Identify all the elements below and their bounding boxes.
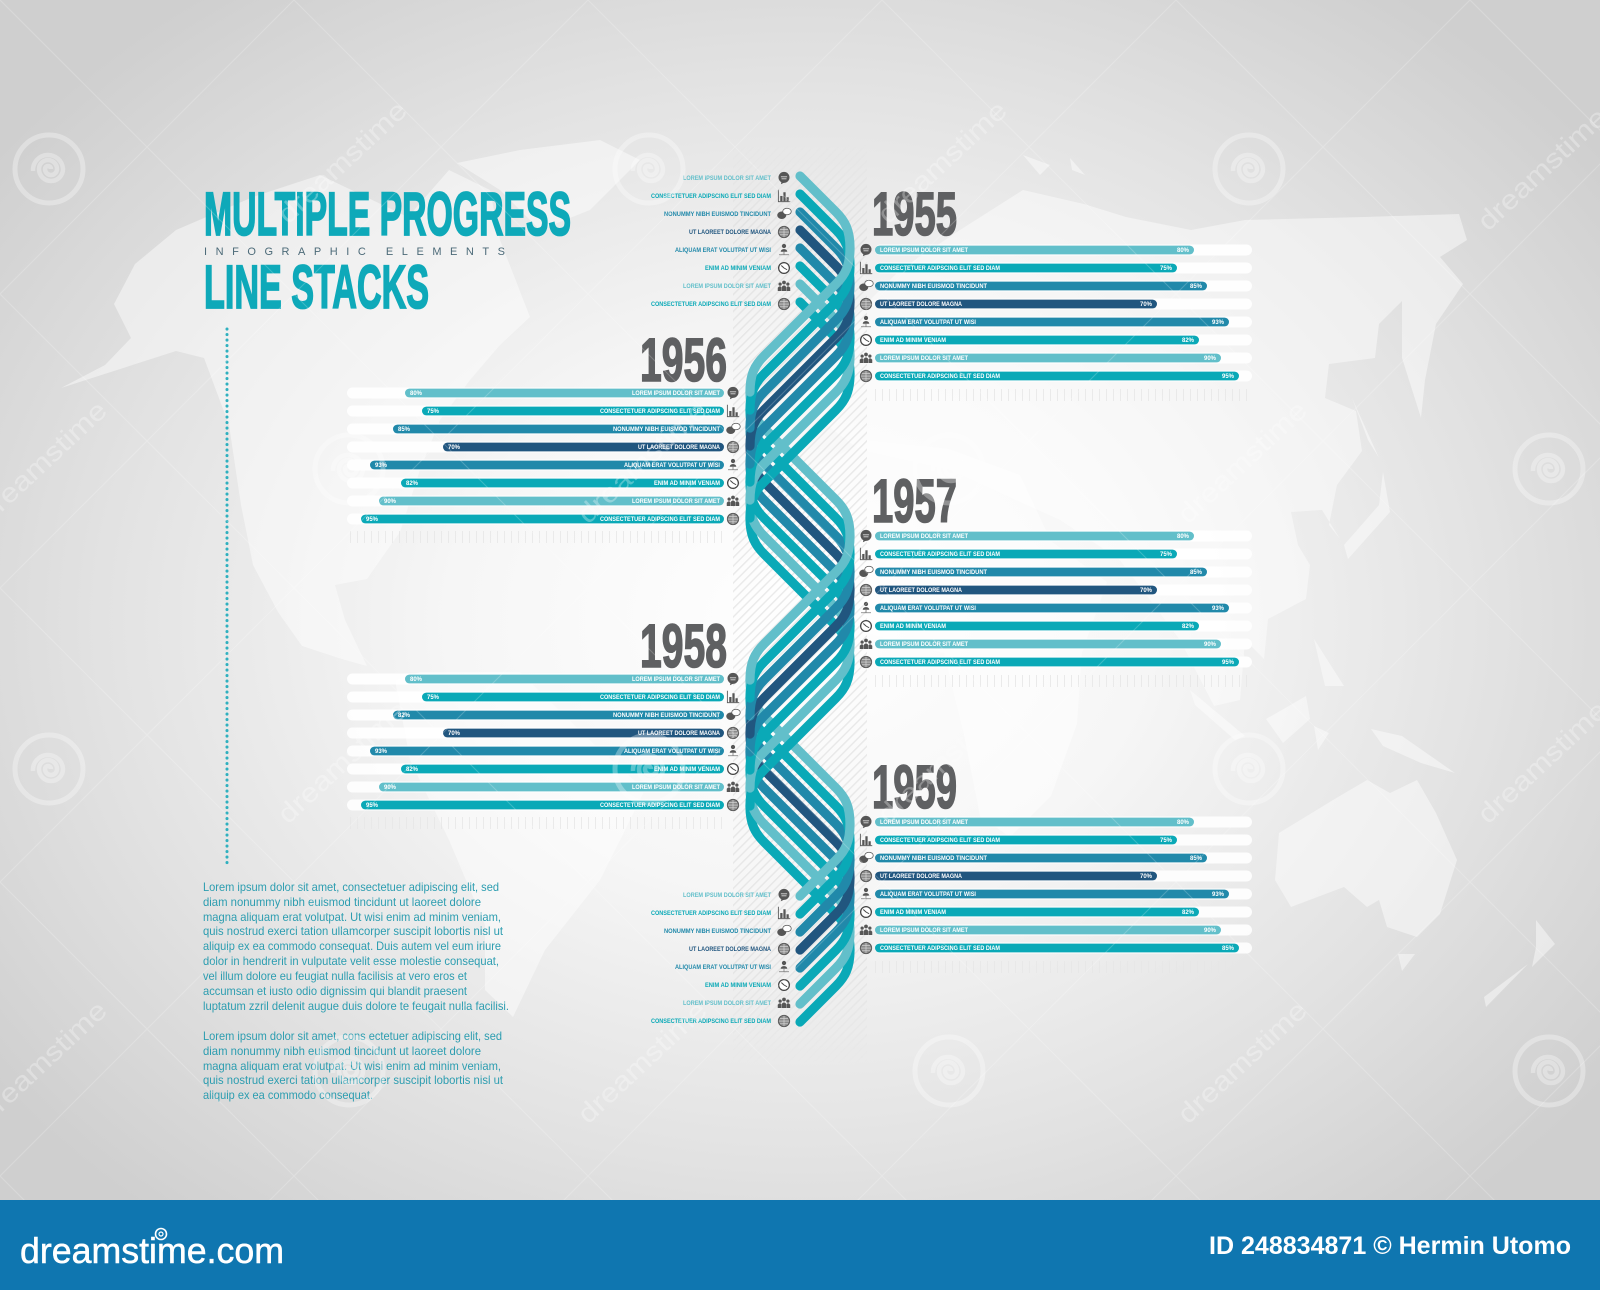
top label stack: CONSECTETUER ADIPSCING ELIT SED DIAM	[651, 301, 771, 308]
panel: 1957: NONUMMY NIBH EUISMOD TINCIDUNT	[880, 569, 987, 576]
panel: 1955: LOREM IPSUM DOLOR SIT AMET	[880, 247, 968, 254]
panel: 1957: LOREM IPSUM DOLOR SIT AMET	[880, 641, 968, 648]
panel: 1957	[859, 467, 1252, 687]
helix backdrop stripes	[733, 206, 867, 996]
bottom label stack: ENIM AD MINIM VENIAM	[705, 982, 771, 989]
body text: diam nonummy nibh euismod tincidunt ut laoreet dolore	[203, 1044, 481, 1058]
panel: 1959	[859, 753, 1252, 973]
bottom label stack: LOREM IPSUM DOLOR SIT AMET	[683, 1000, 771, 1007]
top label stack: LOREM IPSUM DOLOR SIT AMET	[683, 175, 771, 182]
body text: aliquip ex ea commodo consequat. Duis autem vel eum iriure	[203, 939, 501, 953]
panel: 1955: UT LAOREET DOLORE MAGNA	[880, 301, 962, 308]
panel: 1956: CONSECTETUER ADIPSCING ELIT SED DIAM	[600, 516, 720, 523]
body text: quis nostrud exerci tation ullamcorper suscipit lobortis nisl ut	[203, 924, 504, 938]
panel: 1958: NONUMMY NIBH EUISMOD TINCIDUNT	[613, 712, 720, 719]
panel: 1959: LOREM IPSUM DOLOR SIT AMET	[880, 927, 968, 934]
panel: 1959: 75%	[1160, 838, 1173, 844]
bottom label stack	[651, 889, 791, 1027]
bottom label stack: NONUMMY NIBH EUISMOD TINCIDUNT	[664, 928, 771, 935]
panel: 1958: CONSECTETUER ADIPSCING ELIT SED DIAM	[600, 694, 720, 701]
top label stack: CONSECTETUER ADIPSCING ELIT SED DIAM	[651, 193, 771, 200]
panel: 1959: 80%	[1177, 820, 1190, 826]
body text: quis nostrud exerci tation ullamcorper suscipit lobortis nisl ut	[203, 1073, 504, 1087]
panel: 1956: 93%	[375, 463, 388, 469]
watermarks: dreamstime	[272, 95, 413, 229]
title: INFOGRAPHIC ELEMENTS	[204, 246, 505, 258]
watermarks: dreamstime	[572, 395, 713, 529]
panel: 1955: 93%	[1212, 320, 1225, 326]
panel: 1959: CONSECTETUER ADIPSCING ELIT SED DIAM	[880, 837, 1000, 844]
top label stack: LOREM IPSUM DOLOR SIT AMET	[683, 283, 771, 290]
panel: 1958	[347, 612, 740, 829]
watermarks: dreamstime	[1472, 695, 1600, 829]
panel: 1956: 70%	[448, 445, 461, 451]
panel: 1955: ALIQUAM ERAT VOLUTPAT UT WISI	[880, 319, 976, 326]
watermarks: dreamstime	[572, 995, 713, 1129]
body text	[203, 880, 509, 1102]
world map	[61, 140, 1555, 1017]
panel: 1959: 93%	[1212, 892, 1225, 898]
panel: 1957: 80%	[1177, 534, 1190, 540]
panel: 1959: 85%	[1190, 856, 1203, 862]
title	[204, 180, 571, 321]
panel: 1958: 82%	[398, 713, 411, 719]
panel: 1957: 82%	[1182, 624, 1195, 630]
panel: 1957: 70%	[1140, 588, 1153, 594]
panel: 1959: CONSECTETUER ADIPSCING ELIT SED DIAM	[880, 945, 1000, 952]
helix ribbon stack	[750, 176, 850, 1022]
body text: magna aliquam erat volutpat. Ut wisi enim ad minim veniam,	[203, 1059, 501, 1073]
panel: 1955: 95%	[1222, 374, 1235, 380]
bottom label stack: LOREM IPSUM DOLOR SIT AMET	[683, 892, 771, 899]
watermarks: dreamstime	[272, 695, 413, 829]
panel: 1959: 82%	[1182, 910, 1195, 916]
panel: 1958: 1958	[640, 612, 727, 680]
panel: 1957: ALIQUAM ERAT VOLUTPAT UT WISI	[880, 605, 976, 612]
panel: 1958: UT LAOREET DOLORE MAGNA	[638, 730, 720, 737]
panel: 1955	[859, 180, 1252, 401]
body text: aliquip ex ea commodo consequat.	[203, 1088, 373, 1102]
panel: 1958: CONSECTETUER ADIPSCING ELIT SED DIAM	[600, 802, 720, 809]
panel: 1956	[347, 326, 740, 543]
bottom label stack: CONSECTETUER ADIPSCING ELIT SED DIAM	[651, 1018, 771, 1025]
body text: accumsan et iusto odio dignissim qui blandit praesent	[203, 984, 468, 998]
panel: 1958: LOREM IPSUM DOLOR SIT AMET	[632, 784, 720, 791]
panel: 1956: LOREM IPSUM DOLOR SIT AMET	[632, 390, 720, 397]
panel: 1955: 1955	[872, 180, 957, 248]
panel: 1957: 75%	[1160, 552, 1173, 558]
top label stack	[651, 172, 791, 310]
top label stack: ENIM AD MINIM VENIAM	[705, 265, 771, 272]
watermarks: dreamstime	[1472, 102, 1600, 236]
panel: 1956: 1956	[640, 326, 727, 394]
body text: Lorem ipsum dolor sit amet, consectetuer adipiscing elit, sed	[203, 880, 499, 894]
panel: 1957: 93%	[1212, 606, 1225, 612]
body text: dolor in hendrerit in vulputate velit esse molestie consequat,	[203, 954, 499, 968]
panel: 1958: 75%	[427, 695, 440, 701]
panel: 1958: 80%	[410, 677, 423, 683]
footer logo: dreamstime.com	[20, 1230, 284, 1271]
panel: 1957: 1957	[872, 467, 957, 535]
panel: 1956: ENIM AD MINIM VENIAM	[654, 480, 720, 487]
panel: 1957: 95%	[1222, 660, 1235, 666]
panel: 1955: 80%	[1177, 248, 1190, 254]
watermarks: dreamstime	[1172, 395, 1313, 529]
panel: 1959: 85%	[1222, 946, 1235, 952]
footer credit: ID 248834871 © Hermin Utomo	[1209, 1232, 1571, 1260]
panel: 1956: 95%	[366, 517, 379, 523]
panel: 1958: ALIQUAM ERAT VOLUTPAT UT WISI	[624, 748, 720, 755]
panel: 1956: NONUMMY NIBH EUISMOD TINCIDUNT	[613, 426, 720, 433]
panel: 1959: ENIM AD MINIM VENIAM	[880, 909, 946, 916]
panel: 1957: UT LAOREET DOLORE MAGNA	[880, 587, 962, 594]
top label stack: ALIQUAM ERAT VOLUTPAT UT WISI	[675, 247, 771, 254]
panel: 1959: NONUMMY NIBH EUISMOD TINCIDUNT	[880, 855, 987, 862]
panel: 1956: 90%	[384, 499, 397, 505]
panel: 1958: 82%	[406, 767, 419, 773]
panel: 1955: CONSECTETUER ADIPSCING ELIT SED DIAM	[880, 373, 1000, 380]
body text: vel illum dolore eu feugiat nulla facilisis at vero eros et	[203, 969, 468, 983]
panel: 1958: LOREM IPSUM DOLOR SIT AMET	[632, 676, 720, 683]
panel: 1957: 90%	[1204, 642, 1217, 648]
panel: 1955: ENIM AD MINIM VENIAM	[880, 337, 946, 344]
bottom label stack: CONSECTETUER ADIPSCING ELIT SED DIAM	[651, 910, 771, 917]
panel: 1955: 82%	[1182, 338, 1195, 344]
panel: 1959: 70%	[1140, 874, 1153, 880]
panel: 1956: 82%	[406, 481, 419, 487]
body text: luptatum zzril delenit augue duis dolore te feugait nulla facilisi.	[203, 999, 509, 1013]
panel: 1955: LOREM IPSUM DOLOR SIT AMET	[880, 355, 968, 362]
panel: 1957: CONSECTETUER ADIPSCING ELIT SED DIAM	[880, 659, 1000, 666]
panel: 1958: 90%	[384, 785, 397, 791]
panel: 1956: LOREM IPSUM DOLOR SIT AMET	[632, 498, 720, 505]
panel: 1955: 70%	[1140, 302, 1153, 308]
title: MULTIPLE PROGRESS	[204, 180, 571, 248]
body text: diam nonummy nibh euismod tincidunt ut laoreet dolore	[203, 895, 481, 909]
panel: 1956: ALIQUAM ERAT VOLUTPAT UT WISI	[624, 462, 720, 469]
panel: 1955: CONSECTETUER ADIPSCING ELIT SED DIAM	[880, 265, 1000, 272]
top label stack: UT LAOREET DOLORE MAGNA	[689, 229, 771, 236]
panel: 1955: 75%	[1160, 266, 1173, 272]
panel: 1955: NONUMMY NIBH EUISMOD TINCIDUNT	[880, 283, 987, 290]
panel: 1958: ENIM AD MINIM VENIAM	[654, 766, 720, 773]
bottom label stack: ALIQUAM ERAT VOLUTPAT UT WISI	[675, 964, 771, 971]
footer bar	[0, 1200, 1600, 1290]
panel: 1959: ALIQUAM ERAT VOLUTPAT UT WISI	[880, 891, 976, 898]
panel: 1959: UT LAOREET DOLORE MAGNA	[880, 873, 962, 880]
body text: Lorem ipsum dolor sit amet, cons ectetuer adipiscing elit, sed	[203, 1029, 502, 1043]
watermarks: dreamstime	[872, 695, 1013, 829]
watermarks: dreamstime	[1172, 995, 1313, 1129]
panel: 1955: 85%	[1190, 284, 1203, 290]
panel: 1958: 95%	[366, 803, 379, 809]
panel: 1957: LOREM IPSUM DOLOR SIT AMET	[880, 533, 968, 540]
panel: 1957: 85%	[1190, 570, 1203, 576]
panel: 1956: CONSECTETUER ADIPSCING ELIT SED DIAM	[600, 408, 720, 415]
panel: 1956: 75%	[427, 409, 440, 415]
panel: 1958: 70%	[448, 731, 461, 737]
panel: 1959: LOREM IPSUM DOLOR SIT AMET	[880, 819, 968, 826]
panel: 1955: 90%	[1204, 356, 1217, 362]
body text: magna aliquam erat volutpat. Ut wisi enim ad minim veniam,	[203, 910, 501, 924]
panel: 1956: 80%	[410, 391, 423, 397]
title: LINE STACKS	[204, 253, 429, 321]
panel: 1956: 85%	[398, 427, 411, 433]
top label stack: NONUMMY NIBH EUISMOD TINCIDUNT	[664, 211, 771, 218]
panel: 1957: ENIM AD MINIM VENIAM	[880, 623, 946, 630]
panel: 1956: UT LAOREET DOLORE MAGNA	[638, 444, 720, 451]
panel: 1959: 90%	[1204, 928, 1217, 934]
panel: 1957: CONSECTETUER ADIPSCING ELIT SED DIAM	[880, 551, 1000, 558]
panel: 1958: 93%	[375, 749, 388, 755]
panel: 1959: 1959	[872, 753, 957, 821]
bottom label stack: UT LAOREET DOLORE MAGNA	[689, 946, 771, 953]
dotted timeline line	[226, 329, 228, 866]
watermarks: dreamstime	[872, 95, 1013, 229]
